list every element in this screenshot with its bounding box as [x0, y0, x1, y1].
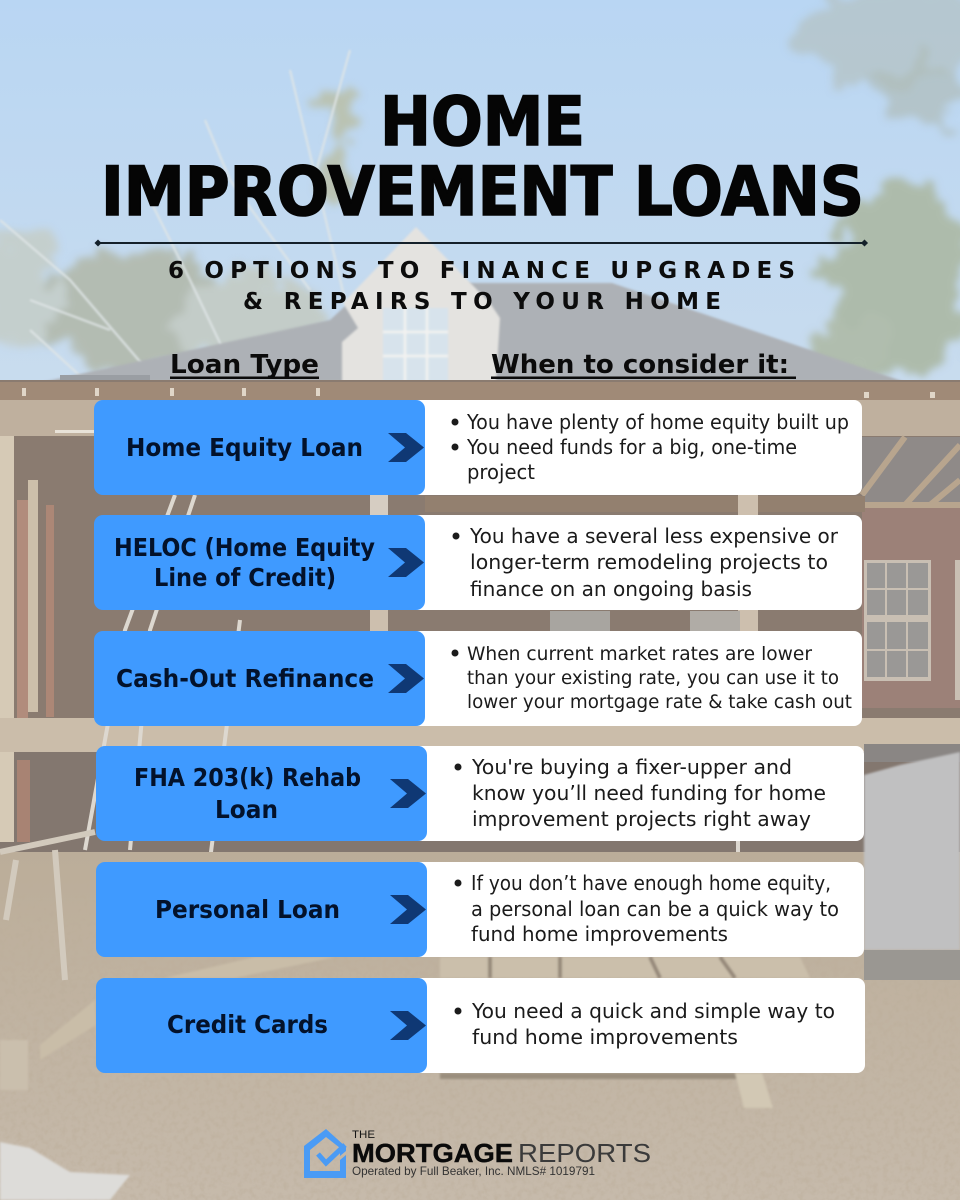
row: HELOC: HELOC (Home Equity	[114, 533, 375, 562]
row: credit cards	[96, 978, 865, 1073]
row: credit cards: fund home improvements	[472, 1025, 738, 1049]
row: home equity loan: Home Equity Loan	[126, 433, 363, 462]
divider rule	[94, 239, 868, 247]
subtitle: & REPAIRS TO YOUR HOME	[243, 289, 721, 315]
row: cash-out refinance: When current market rates are lower	[467, 644, 812, 665]
row: FHA 203(k) rehab loan: You're buying a fixer-upper and	[471, 755, 792, 779]
row: cash-out refinance	[94, 631, 862, 726]
title: IMPROVEMENT LOANS	[101, 153, 864, 232]
left column and brick	[0, 436, 14, 856]
column heading: loan type: Loan Type	[170, 350, 319, 380]
row: FHA 203(k) rehab loan: Loan	[215, 795, 278, 824]
row: cash-out refinance: Cash-Out Refinance	[116, 664, 374, 693]
lumber on the ground	[0, 957, 810, 1108]
row: home equity loan: You need funds for a big, one-time	[466, 435, 797, 459]
row: HELOC: finance on an ongoing basis	[470, 577, 752, 601]
right trusses, wall and window	[862, 437, 960, 507]
ladder	[85, 495, 738, 860]
row: home equity loan	[94, 400, 862, 495]
dormer	[342, 227, 500, 382]
row: credit cards: You need a quick and simple way to	[471, 999, 835, 1023]
logo: The Mortgage Reports: THE	[352, 1129, 375, 1141]
row: personal loan: a personal loan can be a quick way to	[471, 897, 839, 921]
row: personal loan	[96, 862, 864, 957]
row: HELOC: Line of Credit)	[154, 563, 336, 592]
row: personal loan: fund home improvements	[471, 922, 728, 946]
subtitle: 6 OPTIONS TO FINANCE UPGRADES	[168, 258, 795, 284]
title: HOME	[380, 83, 585, 162]
logo: The Mortgage Reports: REPORTS	[518, 1138, 651, 1168]
title	[101, 83, 864, 232]
row: FHA 203(k) rehab loan: FHA 203(k) Rehab	[134, 763, 361, 792]
logo: The Mortgage Reports	[304, 1129, 651, 1178]
row: FHA 203(k) rehab loan: know you’ll need funding for home	[472, 781, 826, 805]
plastic sheet	[0, 1142, 130, 1200]
logo: The Mortgage Reports: Operated by Full Beaker, Inc. NMLS# 1019791	[352, 1164, 595, 1178]
horizontal beam	[0, 718, 960, 752]
porch frame and walls	[0, 380, 960, 860]
gap details between rows	[425, 496, 865, 512]
subtitle	[168, 258, 795, 315]
row: home equity loan: You have plenty of home equity built up	[466, 410, 849, 434]
row: FHA 203(k) rehab loan: improvement projects right away	[472, 807, 811, 831]
row: HELOC: longer-term remodeling projects to	[470, 550, 828, 574]
row: cash-out refinance: lower your mortgage rate & take cash out	[467, 692, 852, 713]
roof	[43, 283, 905, 382]
ground	[0, 852, 960, 1200]
row: personal loan: Personal Loan	[155, 895, 340, 924]
tarp	[864, 744, 960, 762]
logo: The Mortgage Reports: MORTGAGE	[352, 1138, 513, 1168]
row: credit cards: Credit Cards	[167, 1010, 328, 1039]
row: personal loan: If you don’t have enough home equity,	[471, 871, 831, 895]
icon: house with check mark	[304, 1129, 346, 1178]
row: HELOC	[94, 515, 862, 610]
sawhorse	[0, 832, 95, 980]
row: FHA 203(k) rehab loan	[96, 746, 864, 841]
row: cash-out refinance: than your existing rate, you can use it to	[467, 668, 839, 689]
column heading: when to consider it: When to consider it:	[491, 350, 789, 380]
row: home equity loan: project	[467, 460, 535, 484]
row: HELOC: You have a several less expensive or	[469, 524, 839, 548]
